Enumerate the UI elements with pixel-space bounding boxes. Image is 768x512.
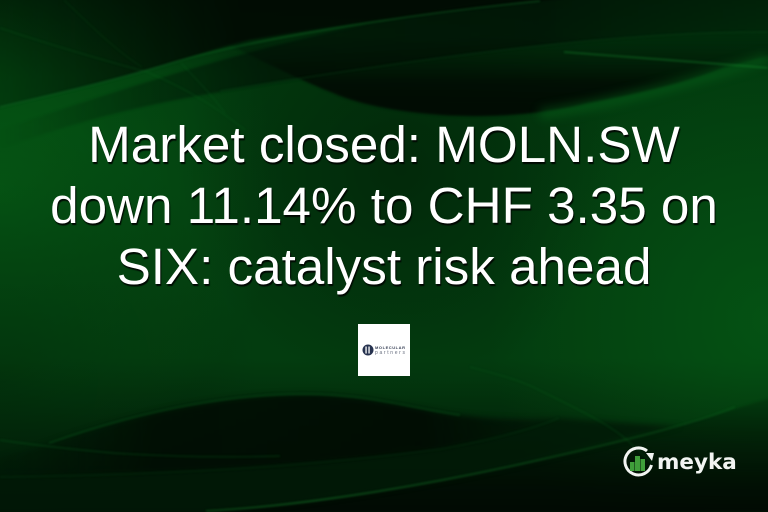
- title: down 11.14% to CHF 3.35 on: [50, 177, 718, 234]
- company logo: Molecular Partners: [358, 324, 410, 376]
- title: [50, 116, 718, 297]
- brand name: meyka: [657, 450, 737, 475]
- brand: meyka logo: [623, 446, 737, 476]
- logo wordmark: [375, 345, 405, 355]
- bright band beneath lens: [540, 58, 768, 114]
- logo wordmark: MOLECULAR: [375, 345, 405, 350]
- icon: meyka circle with bars: [623, 446, 654, 476]
- icon: logo mark: [362, 344, 374, 356]
- title: Market closed: MOLN.SW: [88, 116, 680, 173]
- title: SIX: catalyst risk ahead: [117, 238, 651, 295]
